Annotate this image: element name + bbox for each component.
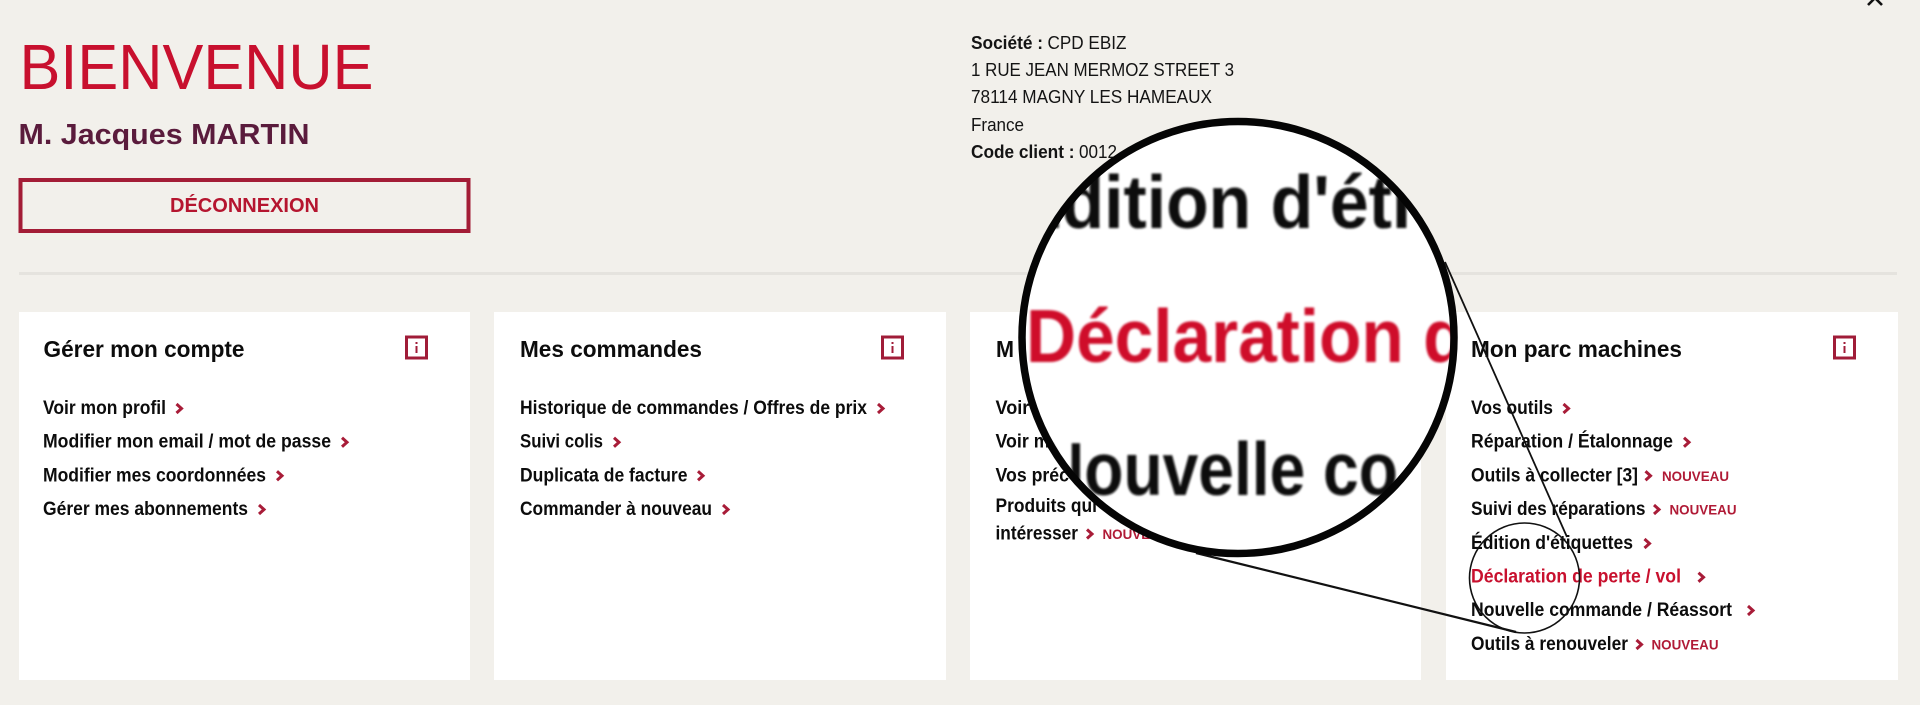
lens ring bbox=[1022, 122, 1454, 554]
callout: connector lines bbox=[1196, 262, 1567, 632]
link: Déclaration de perte / vol: Déclaration de perte / vol bbox=[1471, 567, 1681, 588]
visible link fragments: Voir m bbox=[996, 432, 1050, 453]
title: BIENVENUE bbox=[20, 31, 374, 103]
link: Duplicata de facture: Duplicata de facture bbox=[520, 465, 688, 486]
magnified text: Déclaration d bbox=[1026, 296, 1465, 379]
link: Suivi colis: Suivi colis bbox=[520, 432, 603, 453]
visible link fragments: Voir bbox=[996, 398, 1030, 419]
heading: Mon parc machines: Mon parc machines bbox=[1471, 336, 1682, 362]
user name: M. Jacques MARTIN bbox=[18, 119, 310, 151]
heading: Gérer mon compte: Gérer mon compte bbox=[44, 336, 244, 362]
magnified text bbox=[1028, 170, 1450, 498]
magnified text: Édition d'éti bbox=[1015, 161, 1411, 245]
panel: Gérer mon compte bbox=[19, 312, 470, 680]
heading fragment: M bbox=[996, 336, 1014, 362]
link: Outils à collecter: NOUVEAU bbox=[1662, 469, 1729, 484]
company details: 78114 MAGNY LES HAMEAUX bbox=[971, 86, 1212, 107]
panel: Mon parc machines bbox=[1446, 312, 1898, 680]
company details bbox=[971, 32, 1234, 162]
company details: 1 RUE JEAN MERMOZ STREET 3 bbox=[971, 59, 1234, 80]
link: Outils à renouveler: Outils à renouveler bbox=[1471, 634, 1629, 655]
link: Suivi des réparations: NOUVEAU bbox=[1670, 502, 1736, 518]
link: Nouvelle commande / Réassort: Nouvelle commande / Réassort bbox=[1471, 600, 1733, 621]
link: Historique de commandes: Historique de commandes / Offres de prix bbox=[520, 398, 867, 419]
icon: info bbox=[1834, 337, 1854, 358]
company details: Code client : bbox=[971, 141, 1074, 162]
logout button: DÉCONNEXION bbox=[170, 194, 319, 217]
company details: CPD EBIZ bbox=[1048, 32, 1126, 53]
link: Gérer mes abonnements: Gérer mes abonnements bbox=[43, 499, 248, 520]
icon: info bbox=[882, 337, 902, 358]
visible link fragments: Produits qui bbox=[996, 496, 1097, 517]
link: Commander à nouveau: Commander à nouveau bbox=[520, 499, 712, 520]
close icon bbox=[1868, 0, 1882, 5]
link: Vos outils: Vos outils bbox=[1471, 398, 1553, 419]
link: Réparation / Étalonnage: Réparation / Étalonnage bbox=[1471, 431, 1673, 453]
company details: France bbox=[971, 114, 1024, 135]
link: Outils à collecter: Outils à collecter [3] bbox=[1471, 465, 1638, 486]
panel: third column, mostly hidden by the magnifier bbox=[970, 312, 1421, 680]
company details: Société : bbox=[971, 32, 1043, 53]
logout button bbox=[20, 180, 468, 231]
visible link fragments: intéresser bbox=[996, 524, 1079, 544]
link: Suivi des réparations: Suivi des réparations bbox=[1471, 499, 1646, 520]
link: Voir mon profil: Voir mon profil bbox=[43, 398, 166, 419]
callout: magnifier lens bbox=[1015, 122, 1465, 554]
icon: info bbox=[406, 337, 426, 358]
visible link fragments: NOUVEAU bbox=[1102, 527, 1170, 542]
link: Modifier mes coordonnées: Modifier mes coordonnées bbox=[43, 465, 266, 486]
panel: Mes commandes bbox=[494, 312, 946, 680]
company details: 0012 bbox=[1079, 141, 1117, 162]
callout: small focus circle bbox=[1470, 523, 1580, 633]
heading: Mes commandes: Mes commandes bbox=[520, 336, 702, 362]
visible link fragments bbox=[996, 398, 1170, 544]
link: Modifier mon email: Modifier mon email / mot de passe bbox=[43, 432, 331, 453]
link: Outils à renouveler: NOUVEAU bbox=[1652, 638, 1718, 652]
link: Outils à renouveler bbox=[1471, 634, 1718, 655]
visible link fragments: Vos préc bbox=[996, 465, 1069, 486]
magnified text: Nouvelle co bbox=[1038, 427, 1398, 511]
link: Édition d'étiquettes: Édition d'étiquettes bbox=[1471, 532, 1633, 554]
